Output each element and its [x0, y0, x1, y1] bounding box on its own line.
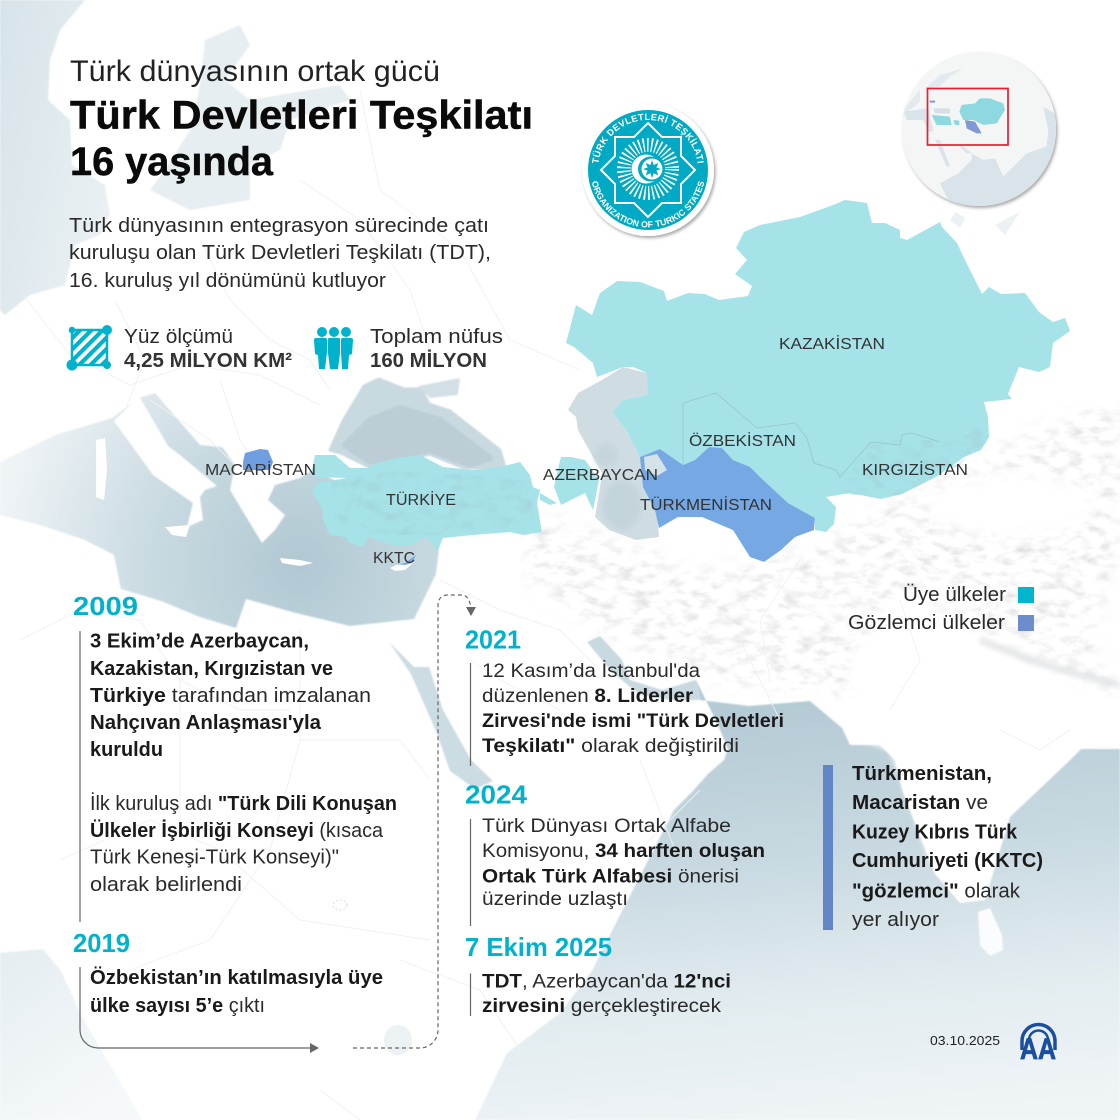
country labels: [205, 334, 968, 567]
sea: indian ocean: [475, 680, 1120, 1120]
country: kazakhstan and uzbekistan: [566, 200, 1070, 532]
timeline: 2009: [73, 591, 397, 896]
year: 2009: [73, 591, 138, 621]
callout: observers: [823, 763, 1043, 931]
terrain relief: [520, 400, 1120, 700]
year: 2024: [465, 780, 528, 810]
entry text: düzenlenen 8. Liderler: [482, 685, 693, 707]
sea: baltic: [150, 25, 350, 210]
callout text: "gözlemci" olarak: [852, 880, 1021, 902]
relief: kyrgyzstan: [840, 420, 990, 495]
intro text: kuruluşu olan Türk Devletleri Teşkilatı (TDT),: [69, 242, 491, 264]
legend: observers: Gözlemci ülkeler: [848, 612, 1005, 634]
timeline: 7 ekim 2025: [465, 932, 731, 1017]
sea: caspian: [568, 367, 659, 540]
stat value: 160 MİLYON: [370, 349, 487, 372]
land: islands: [96, 438, 414, 571]
entry text: Ülkeler İşbirliği Konseyi (kısaca: [90, 819, 384, 842]
stat value: 4,25 MİLYON KM²: [124, 349, 292, 372]
callout bar: [823, 765, 833, 930]
title: 16 yaşında: [70, 140, 274, 184]
tarim basin: [925, 473, 1095, 537]
timeline: 2019: [73, 928, 383, 1017]
title: [70, 94, 533, 184]
globe pacific: [1044, 107, 1056, 146]
intro text: [69, 215, 491, 292]
year: 2021: [465, 624, 521, 654]
locator globe: [900, 52, 1060, 210]
country labels: KIRGIZİSTAN: [862, 460, 968, 479]
year: 7 Ekim 2025: [465, 932, 612, 962]
stat: population: [314, 326, 503, 372]
callout text: Kuzey Kıbrıs Türk: [852, 822, 1018, 844]
entry text: [90, 630, 397, 896]
header: [69, 55, 533, 292]
entry text: Komisyonu, 34 harften oluşan: [482, 840, 765, 862]
intro text: 16. kuruluş yıl dönümünü kutluyor: [69, 270, 386, 292]
globe countries: [929, 98, 1005, 133]
himalaya ridge: [980, 640, 1120, 685]
year: 2019: [73, 928, 130, 958]
country labels: TÜRKİYE: [386, 490, 456, 509]
rule: [470, 819, 472, 926]
globe ocean south: [940, 145, 1054, 206]
entry text: Özbekistan’ın katılmasıyla üye: [90, 966, 383, 989]
country labels: ÖZBEKİSTAN: [689, 431, 796, 450]
sea: red sea: [389, 642, 493, 789]
title: Türk Devletleri Teşkilatı: [70, 94, 533, 138]
kara-bogaz: [644, 454, 667, 476]
entry text: [482, 970, 731, 1017]
logo: organization of turkic states: ORGANIZATION OF TURKIC STATES: [592, 181, 704, 228]
globe frame: [928, 88, 1008, 145]
logo: organization of turkic states: [582, 104, 718, 240]
legend: [848, 584, 1034, 634]
country: northern cyprus: [395, 555, 416, 565]
entry text: İlk kuruluş adı "Türk Dili Konuşan: [90, 792, 397, 815]
india plain: [850, 590, 1100, 890]
lakes and rivers: [333, 212, 1020, 1055]
callout text: Macaristan ve: [852, 792, 988, 814]
logo: anadolu agency: [1020, 1024, 1056, 1066]
entry text: Zirvesi'nde ismi "Türk Devletleri: [482, 710, 784, 732]
sea: gulf of guinea: [0, 949, 143, 1120]
country: turkey: [311, 455, 542, 552]
dashed connector with arrow: [353, 595, 471, 1048]
entry text: TDT, Azerbaycan'da 12'nci: [482, 970, 731, 992]
entry text: Türk Keneşi-Türk Konseyi)": [90, 846, 339, 868]
entry text: [90, 966, 383, 1017]
sea: persian gulf: [587, 636, 700, 700]
entry text: 12 Kasım’da İstanbul'da: [482, 659, 700, 682]
date: 03.10.2025: [930, 1034, 1000, 1048]
sea: mediterranean: [0, 393, 440, 628]
icon: people: [314, 327, 353, 369]
globe mediterranean: [905, 108, 933, 132]
timeline: 2024: [465, 780, 765, 926]
entry text: kuruldu: [90, 739, 163, 761]
border: uzbekistan: [683, 393, 940, 477]
stat: area: [66, 325, 292, 372]
stat label: Yüz ölçümü: [124, 326, 233, 348]
callout text: [852, 763, 1043, 931]
land: italy: [114, 396, 217, 527]
entry text: olarak belirlendi: [90, 874, 242, 896]
legend: members: Üye ülkeler: [903, 584, 1006, 606]
rule: [470, 974, 472, 1016]
logo: anadolu agency: AA: [1020, 1033, 1056, 1066]
callout text: yer alıyor: [852, 909, 939, 931]
entry text: 3 Ekim’de Azerbaycan,: [90, 630, 309, 652]
logo text: TÜRK DEVLETLERİ TEŞKİLATI: [592, 114, 704, 164]
country labels: TÜRKMENİSTAN: [640, 495, 772, 514]
country labels: KAZAKİSTAN: [779, 334, 885, 353]
country: azerbaijan: [540, 457, 599, 510]
country: turkmenistan: [640, 447, 815, 562]
subtitle: Türk dünyasının ortak gücü: [70, 55, 440, 88]
callout text: Türkmenistan,: [852, 763, 992, 785]
land: sri lanka: [978, 908, 1003, 956]
entry text: zirvesini gerçekleştirecek: [482, 995, 721, 1017]
entry text: Teşkilatı" olarak değiştirildi: [482, 735, 739, 757]
icon: area square: [66, 325, 112, 370]
land: balkans: [155, 380, 335, 543]
stat label: Toplam nüfus: [370, 326, 503, 348]
sea: black sea: [330, 378, 505, 468]
globe red sea and gulf: [935, 140, 950, 167]
sea: north atlantic: [0, 0, 110, 315]
country labels: KKTC: [373, 550, 415, 567]
country labels: AZERBAYCAN: [543, 467, 658, 484]
callout text: Cumhuriyeti (KKTC): [852, 850, 1043, 872]
entry text: ülke sayısı 5’e çıktı: [90, 995, 265, 1017]
entry text: Nahçıvan Anlaşması'yla: [90, 712, 322, 734]
globe ocean north: [903, 90, 920, 116]
entry text: [482, 815, 765, 910]
timeline connector: [80, 595, 476, 1053]
solid connector with arrow: [80, 631, 319, 1053]
entry text: [482, 659, 784, 757]
country: hungary: [243, 449, 273, 470]
country labels: MACARİSTAN: [205, 460, 316, 479]
timeline: 2021: [465, 624, 784, 766]
arrow head: [466, 607, 476, 616]
emblem sun: [624, 145, 672, 193]
entry text: Türk Dünyası Ortak Alfabe: [482, 815, 731, 837]
emblem star: [601, 123, 695, 217]
entry text: üzerinde uzlaştı: [482, 888, 628, 910]
entry text: Ortak Türk Alfabesi önerisi: [482, 866, 739, 888]
entry text: Türkiye tarafından imzalanan: [90, 685, 371, 707]
entry text: Kazakistan, Kırgızistan ve: [90, 658, 333, 680]
rule: [470, 663, 472, 766]
intro text: Türk dünyasının entegrasyon sürecinde çatı: [69, 215, 489, 237]
